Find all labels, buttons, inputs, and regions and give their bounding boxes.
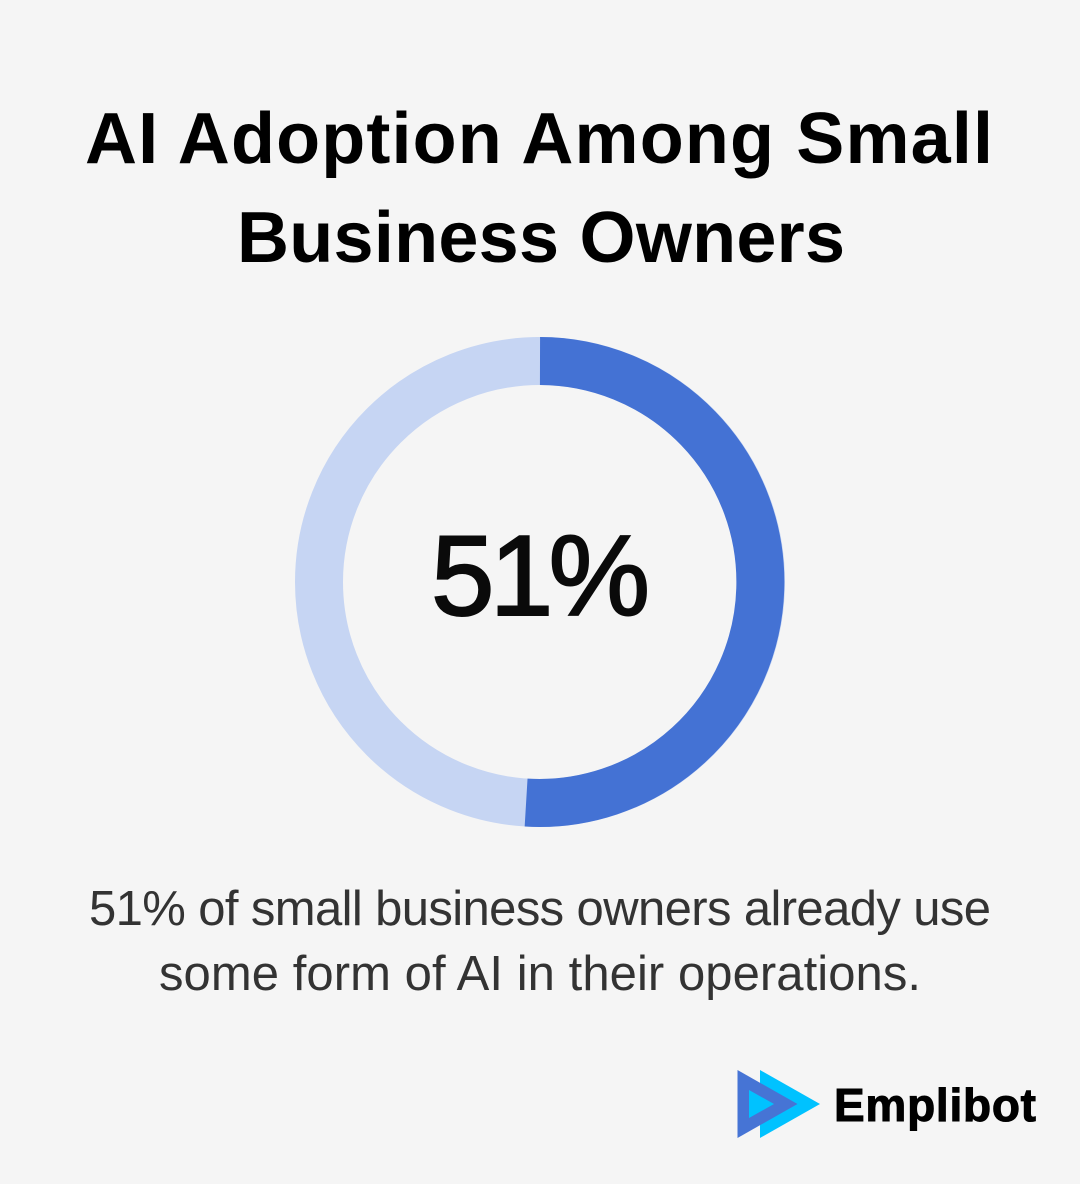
title: Business Owners: [237, 198, 845, 278]
title: AI Adoption Among Small: [85, 99, 993, 179]
logo: Emplibot: [738, 1070, 1036, 1138]
donut track: [319, 361, 761, 803]
description text: 51% of small business owners already use: [89, 882, 991, 936]
center value: 51%: [431, 513, 650, 640]
logo icon: [738, 1070, 820, 1138]
donut value arc: [526, 361, 760, 803]
description text: some form of AI in their operations.: [159, 947, 921, 1001]
logo wordmark: Emplibot: [834, 1079, 1036, 1131]
description text: [89, 882, 991, 1001]
donut chart: 51%: [319, 361, 761, 803]
title: [85, 99, 993, 278]
